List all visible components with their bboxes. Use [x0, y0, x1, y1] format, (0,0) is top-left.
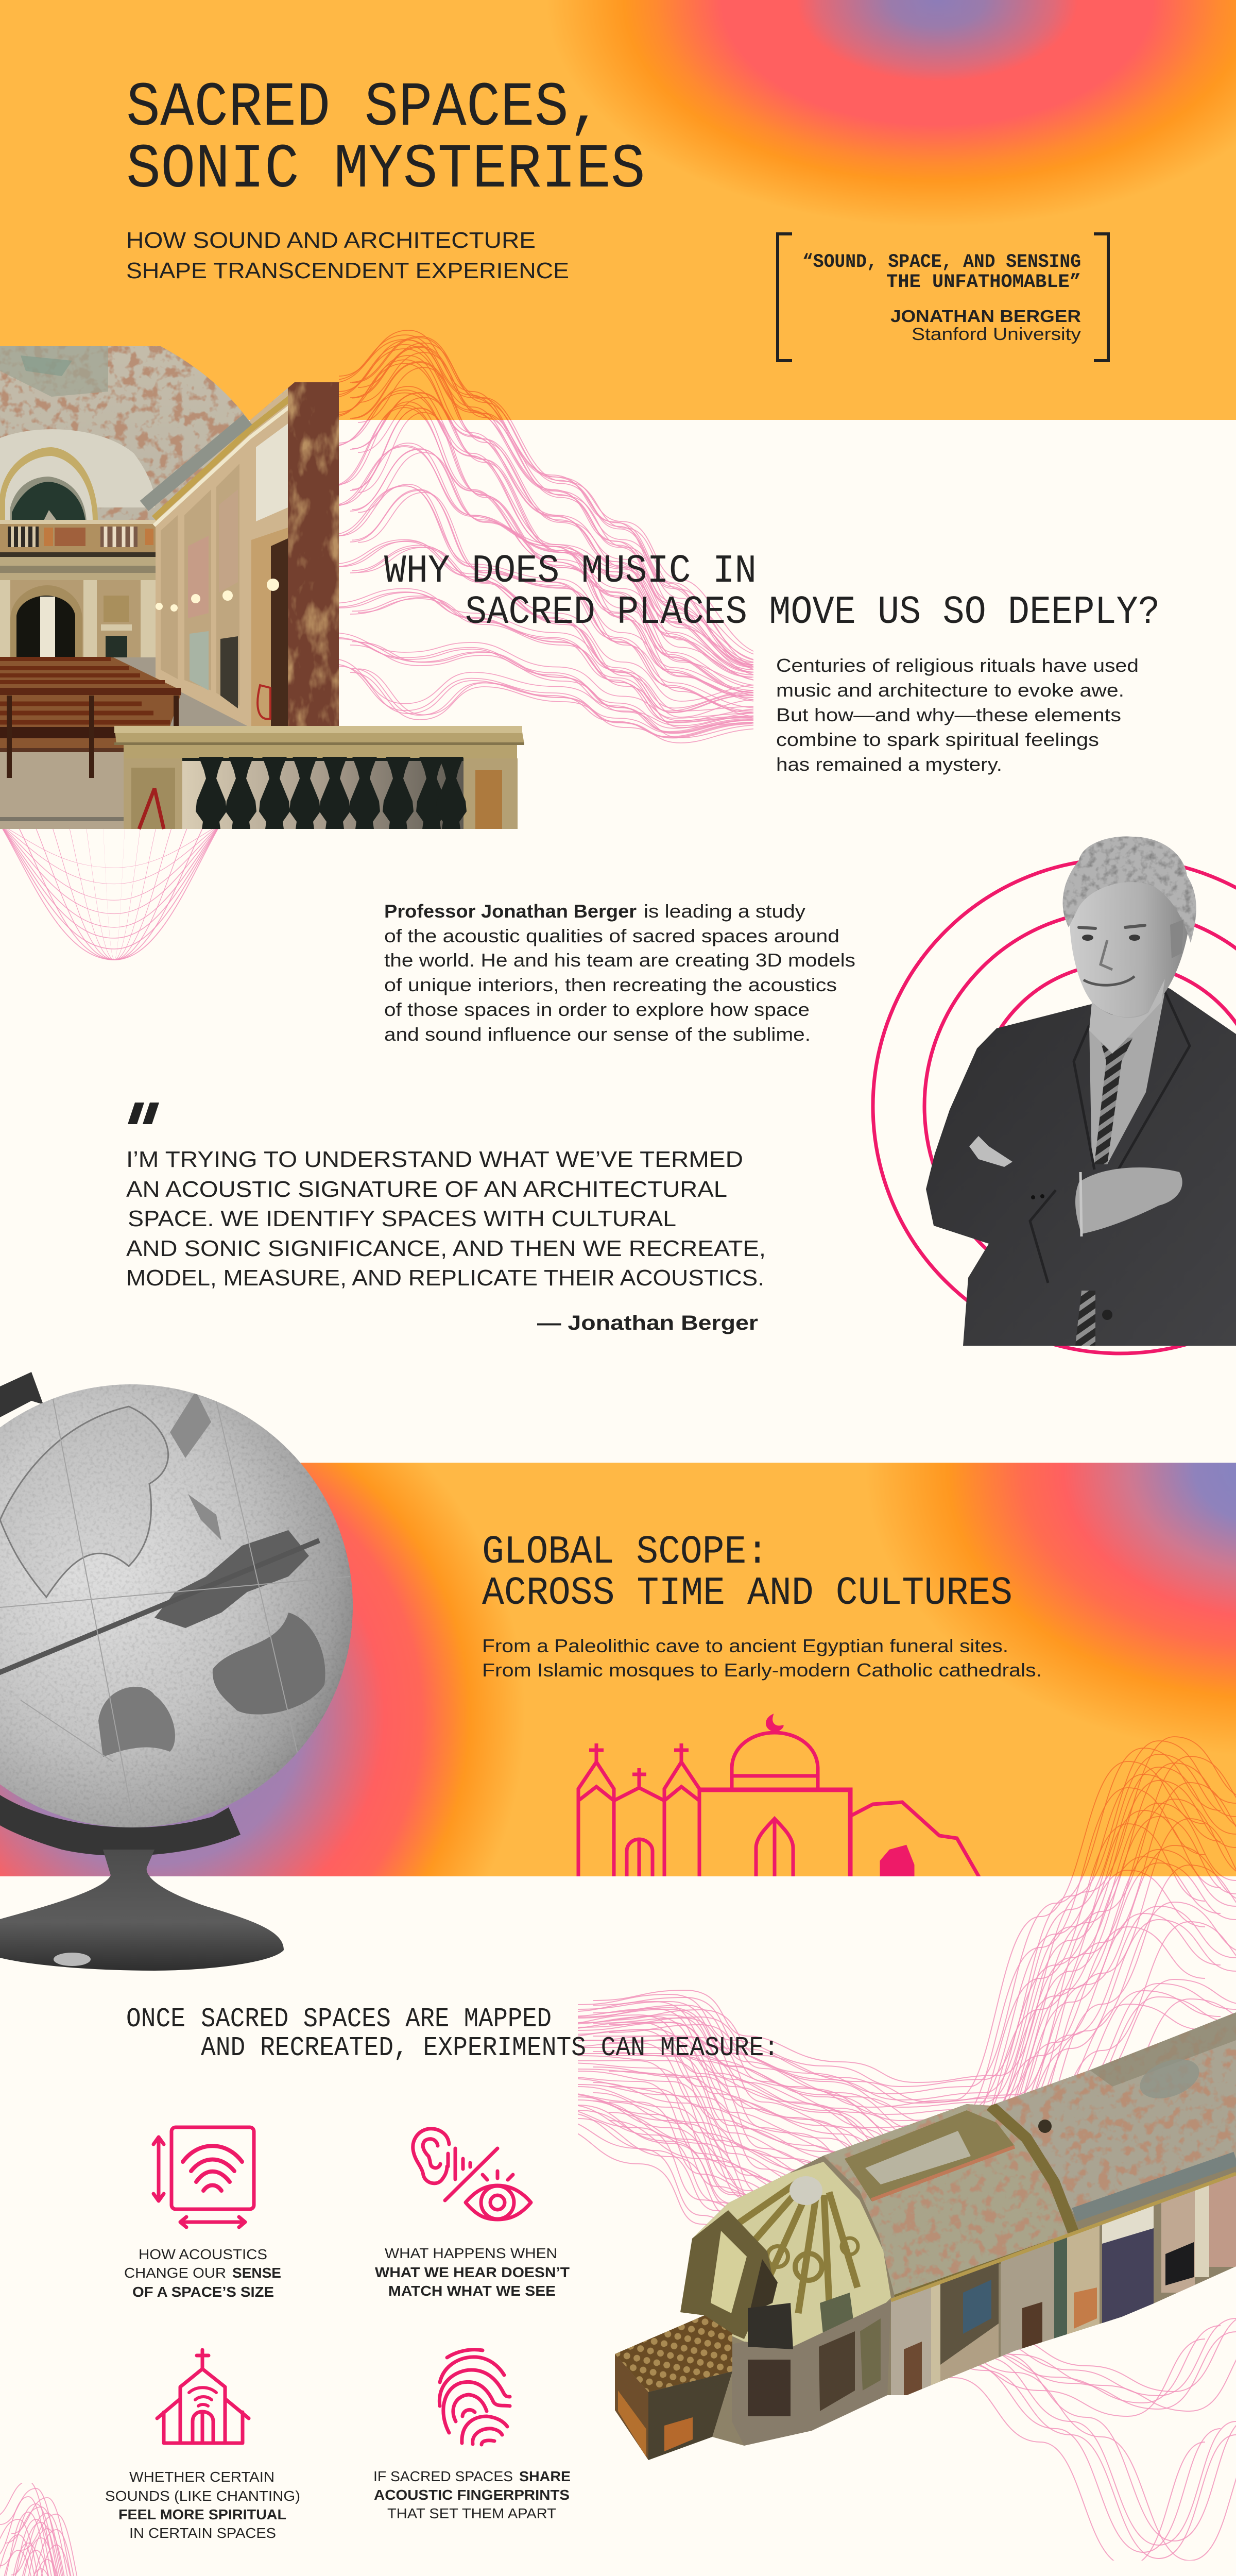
callout: talk quote in brackets: JONATHAN BERGER — [890, 307, 1081, 326]
panel: global scope gradient — [0, 1180, 1236, 2087]
heading: experiments: SACRED SPACES ARE MAPPED — [201, 2004, 552, 2035]
icon: quote mark — [128, 1103, 159, 1124]
intro text: music and architecture to evoke awe. — [776, 680, 1124, 701]
caption: fingerprint: THAT SET THEM APART — [387, 2505, 556, 2521]
dome apse — [680, 2210, 772, 2339]
heading: why does music — [384, 549, 1160, 635]
wall lamps — [156, 579, 279, 612]
callout: talk quote in brackets: THE UNFATHOMABLE” — [886, 272, 1081, 293]
intro text: combine to spark spiritual feelings — [776, 729, 1099, 750]
wave mesh: lower left — [0, 2481, 381, 2576]
marble column — [288, 382, 339, 727]
bio text: of those spaces in order to explore how space — [384, 999, 810, 1020]
icon: fingerprint — [439, 2350, 510, 2445]
balcony — [0, 524, 156, 552]
dome drum — [732, 2300, 891, 2446]
global scope text: From a Paleolithic cave to ancient Egyptian funeral sites. — [482, 1635, 1008, 1656]
pews — [0, 657, 181, 752]
heading: global scope — [482, 1530, 1012, 1616]
caption: sense of size: CHANGE OUR — [124, 2265, 226, 2281]
caption: sense of size: OF A SPACE’S SIZE — [132, 2284, 274, 2300]
vault over lunette — [0, 429, 155, 507]
intro text: But how—and why—these elements — [776, 704, 1121, 725]
caption: fingerprint: IF SACRED SPACES — [373, 2468, 513, 2484]
dome — [680, 2162, 891, 2347]
bio text: and sound influence our sense of the sublime. — [384, 1024, 811, 1045]
globe handle — [0, 1372, 43, 1417]
bio text: Professor Jonathan Berger — [384, 901, 637, 922]
bio text: of the acoustic qualities of sacred spaces around — [384, 925, 839, 946]
bio text: the world. He and his team are creating 3D models — [384, 950, 855, 971]
3D model of chapel — [613, 2009, 1236, 2463]
gold frieze — [154, 395, 295, 518]
wave mesh: behind church right — [331, 330, 770, 743]
lunette — [0, 447, 98, 521]
intro text: has remained a mystery. — [776, 754, 1002, 775]
concentric pink circles — [873, 859, 1236, 1353]
caption: fingerprint — [373, 2468, 571, 2521]
global scope text — [482, 1635, 1042, 1681]
subtitle: HOW SOUND AND ARCHITECTURE — [126, 228, 536, 253]
intro text — [776, 655, 1139, 775]
subtitle — [126, 228, 569, 283]
ceiling fresco — [0, 346, 295, 520]
intro text: Centuries of religious rituals have used — [776, 655, 1139, 676]
title: SONIC MYSTERIES — [126, 134, 645, 206]
caption: sense of size — [124, 2246, 281, 2300]
icon: sense of size — [153, 2127, 254, 2227]
header panel — [0, 0, 1236, 420]
callout: talk quote in brackets: “SOUND, SPACE, AND SENSING — [802, 251, 1081, 273]
caption: ear and eye: WHAT WE HEAR DOESN’T — [375, 2264, 570, 2280]
caption: ear and eye: WHAT HAPPENS WHEN — [385, 2245, 557, 2261]
caption: fingerprint: ACOUSTIC FINGERPRINTS — [374, 2487, 570, 2503]
church interior photo — [0, 346, 524, 831]
caption: church with sound: SOUNDS (LIKE CHANTING) — [105, 2488, 300, 2504]
middle barrel vault — [823, 2104, 1070, 2298]
globe on stand — [0, 1372, 355, 1971]
heading: experiments: AND RECREATED, EXPERIMENTS CAN MEASURE: — [201, 2032, 779, 2063]
entablature — [0, 552, 161, 557]
quote attribution: — Jonathan Berger — [537, 1312, 758, 1334]
caption: ear and eye — [375, 2245, 570, 2299]
bio text: is leading a study — [644, 901, 805, 922]
heading: experiments: ONCE — [126, 2004, 185, 2035]
wave mesh: below church — [0, 824, 220, 960]
heading: why does music: WHY DOES MUSIC IN — [384, 549, 757, 594]
globe stem and base — [0, 1850, 284, 1971]
title — [126, 72, 645, 206]
wave mesh: right of experiments — [547, 1737, 1236, 2566]
heading: experiments — [126, 2004, 779, 2063]
pull quote: I’M TRYING TO UNDERSTAND WHAT WE’VE TERMED — [126, 1147, 743, 1172]
annex — [615, 2315, 732, 2392]
icon: ear and eye — [413, 2129, 531, 2219]
caption: sense of size: SENSE — [232, 2265, 281, 2281]
title: SACRED SPACES, — [126, 72, 603, 144]
caption: church with sound: IN CERTAIN SPACES — [129, 2525, 276, 2541]
plaque — [256, 422, 289, 521]
callout: talk quote in brackets: Stanford University — [912, 325, 1081, 344]
pull quote: SPACE. WE IDENTIFY SPACES WITH CULTURAL — [128, 1206, 676, 1231]
far barrel vault — [990, 2012, 1236, 2215]
caption: fingerprint: SHARE — [519, 2468, 571, 2484]
balustrade — [114, 726, 524, 829]
caption: ear and eye: MATCH WHAT WE SEE — [388, 2283, 556, 2299]
heading: global scope: ACROSS TIME AND CULTURES — [482, 1571, 1012, 1616]
caption: sense of size: HOW ACOUSTICS — [139, 2246, 267, 2262]
icon: church with sound — [157, 2350, 249, 2443]
bio text — [384, 901, 855, 1045]
heading: global scope: GLOBAL SCOPE: — [482, 1530, 768, 1575]
wall panels — [891, 2285, 931, 2421]
pull quote — [126, 1147, 766, 1291]
pull quote: AND SONIC SIGNIFICANCE, AND THEN WE RECREATE, — [126, 1236, 766, 1261]
lower wall — [0, 580, 161, 668]
callout: talk quote in brackets — [778, 234, 1108, 361]
portrait of Jonathan Berger — [926, 836, 1236, 1346]
subtitle: SHAPE TRANSCENDENT EXPERIENCE — [126, 258, 569, 283]
side wall — [156, 384, 295, 727]
pull quote: MODEL, MEASURE, AND REPLICATE THEIR ACOUSTICS. — [126, 1265, 764, 1291]
global scope text: From Islamic mosques to Early-modern Catholic cathedrals. — [482, 1659, 1042, 1681]
caption: church with sound: FEEL MORE SPIRITUAL — [118, 2506, 286, 2522]
caption: church with sound: WHETHER CERTAIN — [129, 2469, 274, 2485]
icon: church, mosque and cave line art — [578, 1715, 981, 1880]
heading: why does music: SACRED PLACES MOVE US SO DEEPLY? — [465, 590, 1160, 635]
floor — [0, 657, 249, 738]
pull quote: AN ACOUSTIC SIGNATURE OF AN ARCHITECTURAL — [126, 1177, 727, 1202]
bio text: of unique interiors, then recreating the acoustics — [384, 974, 837, 995]
sphere — [0, 1381, 355, 1834]
globe stand arc — [0, 1795, 241, 1856]
caption: church with sound — [105, 2469, 300, 2541]
door — [251, 528, 288, 727]
